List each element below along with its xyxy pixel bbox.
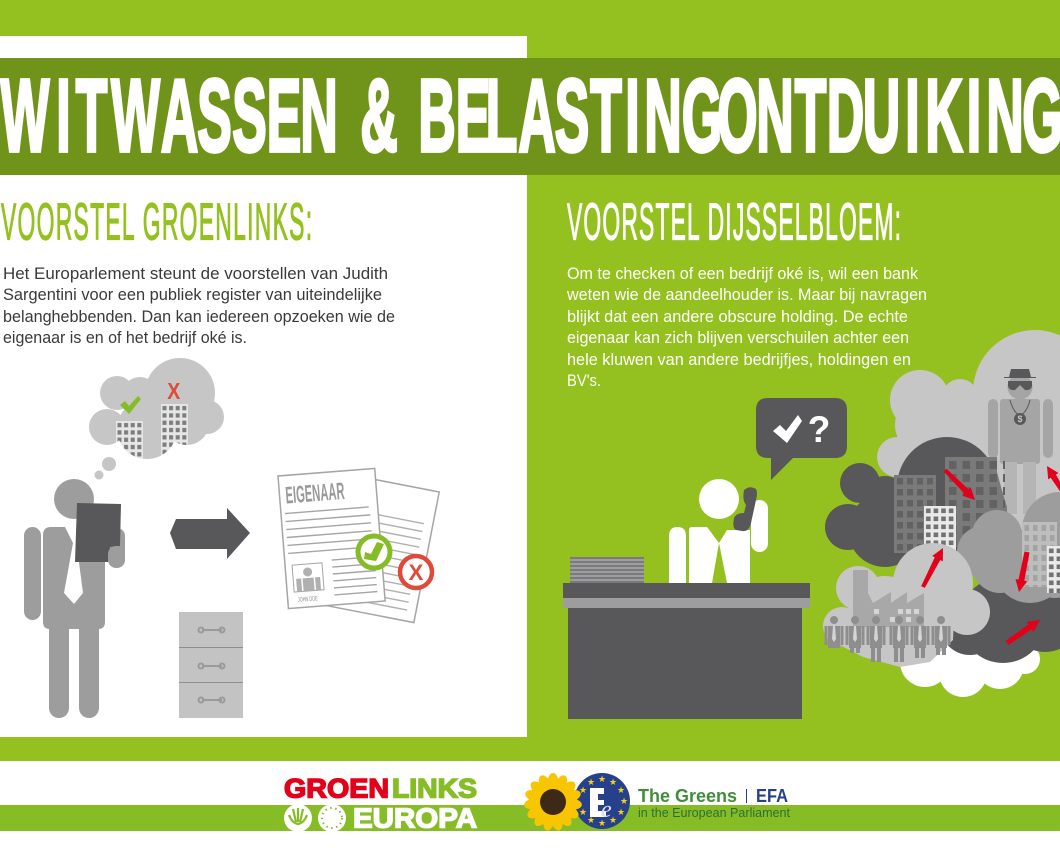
title: WITWASSEN & BELASTINGONTDUIKING (1, 59, 1060, 174)
icon: ownership documents: X (409, 560, 424, 585)
cloud: white bottom (900, 637, 1040, 697)
footer white strip (0, 761, 1060, 848)
text block: dijsselbloem proposal: BV's. (567, 372, 601, 390)
text block: groenlinks proposal: belanghebbenden. Dan kan iedereen opzoeken wie de (3, 308, 395, 326)
icon: ownership documents (278, 468, 439, 623)
logo: eu stars circle: ★ (617, 807, 625, 817)
heading: voorstel groenlinks: VOORSTEL GROENLINKS: (1, 193, 312, 251)
icon: man with hat and chain: $ (1017, 414, 1023, 424)
logo: eu stars circle: ★ (609, 815, 617, 825)
text block: groenlinks proposal: eigenaar is en of het bedrijf oké is. (3, 329, 247, 347)
icon: filing cabinet (179, 612, 243, 718)
logo: groenlinks europa: LINKS (392, 774, 477, 804)
logo: sunflower (524, 773, 582, 832)
text block: groenlinks proposal (3, 265, 395, 347)
logo: eu stars circle: ★ (620, 796, 628, 806)
logo: the greens efa text: in the European Parliament (638, 805, 790, 820)
icon: thought cloud with buildings: X (167, 379, 181, 404)
arrow: left panel (170, 508, 250, 559)
logo: eu stars circle: ★ (598, 818, 606, 828)
logo: eu stars circle: e (601, 797, 612, 823)
logo: eu stars circle: ★ (587, 777, 595, 787)
icon: ownership documents: JOHN DOE (298, 595, 318, 604)
logo: eu stars circle (574, 773, 630, 829)
text block: groenlinks proposal: Sargentini voor een publiek register van uiteindelijke (3, 286, 382, 304)
cloud: dark with buildings (825, 437, 1010, 567)
logo: groenlinks europa: EUROPA (353, 802, 477, 834)
footer green band (0, 805, 1060, 831)
text block: groenlinks proposal: Het Europarlement steunt de voorstellen van Judith (3, 265, 388, 283)
logo: groenlinks europa (284, 774, 477, 834)
icon: speech bubble: ? (808, 409, 830, 450)
title band (0, 58, 1060, 175)
logo: the greens efa text: The Greens (638, 786, 737, 806)
logo: eu stars circle: ★ (587, 815, 595, 825)
cloud: light with hidden owner (877, 330, 1060, 530)
text block: dijsselbloem proposal: weten wie de aandeelhouder is. Maar bij navragen (566, 286, 927, 304)
logo: eu stars circle: ★ (609, 777, 617, 787)
text block: dijsselbloem proposal: hele kluwen van andere bedrijfjes, holdingen en (567, 351, 911, 369)
logo: groenlinks europa: GROEN (284, 774, 389, 804)
text block: dijsselbloem proposal: eigenaar kan zich blijven verschuilen achter een (567, 329, 909, 347)
logo: eu stars circle: ★ (579, 807, 587, 817)
icon: speech bubble (756, 398, 847, 480)
arrows: red ownership links (921, 466, 1060, 645)
logo: eu stars circle: ★ (579, 785, 587, 795)
icon: bank employee on phone (669, 479, 768, 583)
icon: ownership documents: EIGENAAR (285, 478, 345, 509)
icon: man reading document (24, 479, 125, 718)
cloud: light with factory and people (823, 543, 990, 667)
cloud: dark bottom right (940, 577, 1060, 663)
logo: eu stars circle: ★ (598, 774, 606, 784)
text block: dijsselbloem proposal (566, 265, 927, 390)
text block: dijsselbloem proposal: Om te checken of een bedrijf oké is, wil een bank (567, 265, 919, 283)
text block: dijsselbloem proposal: blijkt dat een andere obscure holding. De echte (567, 308, 908, 326)
logo: eu stars circle: ★ (617, 785, 625, 795)
icon: man with hat and chain (988, 369, 1053, 514)
icon: desk (563, 583, 810, 719)
logo: the greens efa text: EFA (756, 786, 788, 806)
panel: left white (0, 36, 527, 737)
cloud: medium grey (957, 492, 1060, 603)
icon: stack of papers (570, 557, 644, 583)
logo: the greens efa text (638, 786, 790, 820)
icon: thought cloud with buildings (89, 358, 224, 480)
heading: voorstel dijsselbloem: VOORSTEL DIJSSELBLOEM: (567, 193, 901, 251)
